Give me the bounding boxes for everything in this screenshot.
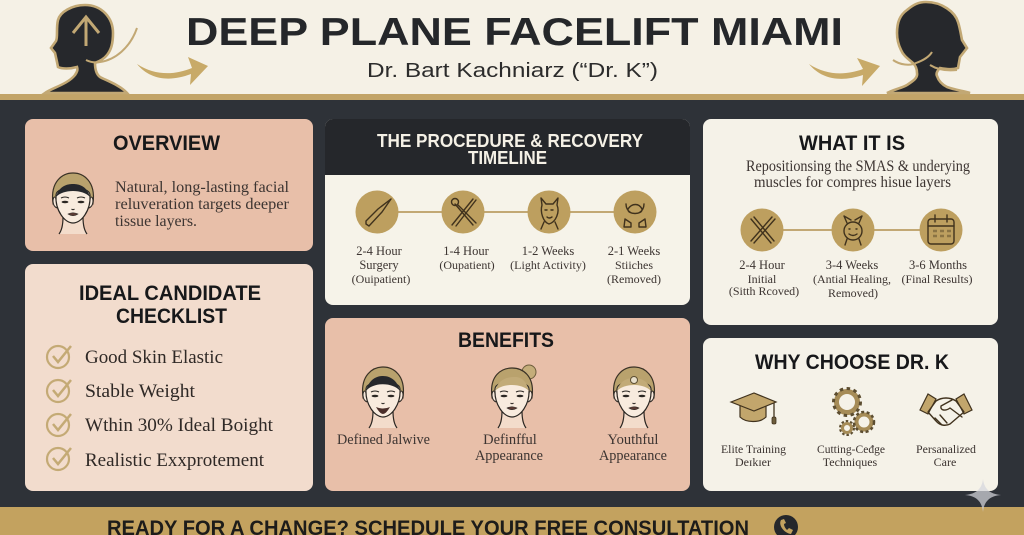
panel: benefits [325, 318, 690, 491]
feature: elite training: Deɪkɪer [735, 455, 771, 469]
panel: procedure and recovery timeline [325, 119, 690, 305]
benefit: defined jawline [337, 367, 430, 448]
feature: elite training: Elite Training [721, 442, 786, 456]
footer call to action bar [0, 507, 1024, 535]
timeline step: initial: Initial [748, 272, 777, 286]
text: overview description: reluveration targets deeper [115, 196, 290, 213]
timeline step 4: (Removed) [607, 272, 661, 286]
heading: timeline: TIMELINE [468, 148, 547, 168]
panel: why choose dr k [703, 338, 998, 491]
checklist item: stable weight [47, 380, 196, 402]
heading: overview: OVERVIEW [113, 132, 220, 155]
heading: what it is: WHAT IT IS [799, 132, 905, 155]
header band [0, 0, 1024, 100]
icon: face [53, 173, 93, 234]
timeline step: final results [902, 208, 973, 286]
text: overview description [115, 179, 290, 230]
timeline step 1: Surgery [359, 258, 399, 272]
feature: elite training [721, 393, 786, 469]
checklist item: within 30 percent: Wthin 30% Ideal Boight [85, 415, 274, 436]
heading: timeline: THE PROCEDURE & RECOVERY [377, 131, 643, 151]
arrow: right gold swoop [809, 58, 880, 86]
feature: cutting edge techniques: Cutting-Ceđge [817, 442, 885, 456]
timeline step: initial: 2-4 Hour [739, 258, 786, 272]
timeline step 3 [510, 190, 586, 272]
benefit: definful appearance: Definfful [483, 432, 537, 448]
timeline step: healing [813, 208, 891, 300]
timeline step: final results: 3-6 Months [909, 258, 967, 272]
timeline step: healing: (Antial Healing, [813, 272, 891, 286]
heading: why choose dr k: WHY CHOOSE DR. K [755, 351, 949, 374]
icon: sparkle watermark [965, 479, 1001, 512]
timeline step 1: (Ouipatient) [352, 272, 410, 286]
benefit: youthful appearance [599, 367, 667, 464]
heading: benefits: BENEFITS [458, 329, 554, 352]
panel: overview [25, 119, 313, 251]
timeline step: initial: (Sitth Rcoved) [729, 284, 799, 298]
heading: ideal candidate checklist [79, 282, 261, 328]
arrow: left gold swoop [137, 57, 208, 85]
icon: left head silhouette with up arrow [45, 5, 137, 93]
timeline step 2: 1-4 Hour [443, 244, 490, 258]
benefit: defined jawline: Defined Jalwive [337, 432, 430, 448]
timeline step: healing: Removed) [828, 286, 878, 300]
text: overview description: Natural, long-lasting facial [115, 179, 290, 196]
benefit: youthful appearance: Youthful [608, 432, 658, 448]
timeline step 4 [607, 190, 661, 286]
benefit: definful appearance [475, 365, 543, 464]
heading: ideal candidate checklist: CHECKLIST [116, 305, 227, 328]
timeline step: final results: (Final Results) [902, 272, 973, 286]
timeline step 3: (Light Activity) [510, 258, 586, 272]
heading: ideal candidate checklist: IDEAL CANDIDATE [79, 282, 261, 305]
timeline step 2: (Oupatient) [439, 258, 495, 272]
text: what it is description: muscles for compres hisue layers [754, 174, 951, 191]
timeline step 4: Stiiches [615, 258, 653, 272]
checklist item: good skin elastic: Good Skin Elastic [85, 347, 223, 368]
feature: cutting edge techniques: Techniques [823, 455, 878, 469]
timeline step 1: 2-4 Hour [356, 244, 403, 258]
feature: personalized care: Persanalized [916, 442, 976, 456]
heading: timeline [377, 131, 643, 168]
feature: personalized care [916, 394, 976, 469]
benefit: youthful appearance: Appearance [599, 448, 667, 464]
timeline step: healing: 3-4 Weeks [826, 258, 878, 272]
timeline step 3: 1-2 Weeks [522, 244, 574, 258]
icon: right head silhouette [887, 2, 970, 93]
timeline step 1 [352, 190, 410, 286]
text: what it is description: Repositionsing the SMAS & underying [746, 158, 970, 175]
benefit: definful appearance: Appearance [475, 448, 543, 464]
checklist item: realistic expectations: Realistic Exxprotement [85, 450, 265, 471]
text: what it is description [746, 158, 970, 191]
text: overview description: tissue layers. [115, 213, 197, 230]
timeline step 2 [439, 190, 495, 272]
icon: phone [774, 515, 798, 535]
timeline step: initial [729, 208, 799, 298]
feature: cutting edge techniques [817, 388, 885, 469]
subtitle: Dr. Bart Kachniarz (“Dr. K”) [367, 60, 658, 82]
feature: personalized care: Care [934, 455, 956, 469]
title: DEEP PLANE FACELIFT MIAMI [186, 11, 843, 54]
timeline step 4: 2-1 Weeks [608, 244, 660, 258]
panel: ideal candidate checklist [25, 264, 313, 491]
checklist item: stable weight: Stable Weight [85, 381, 196, 402]
panel: what it is [703, 119, 998, 325]
